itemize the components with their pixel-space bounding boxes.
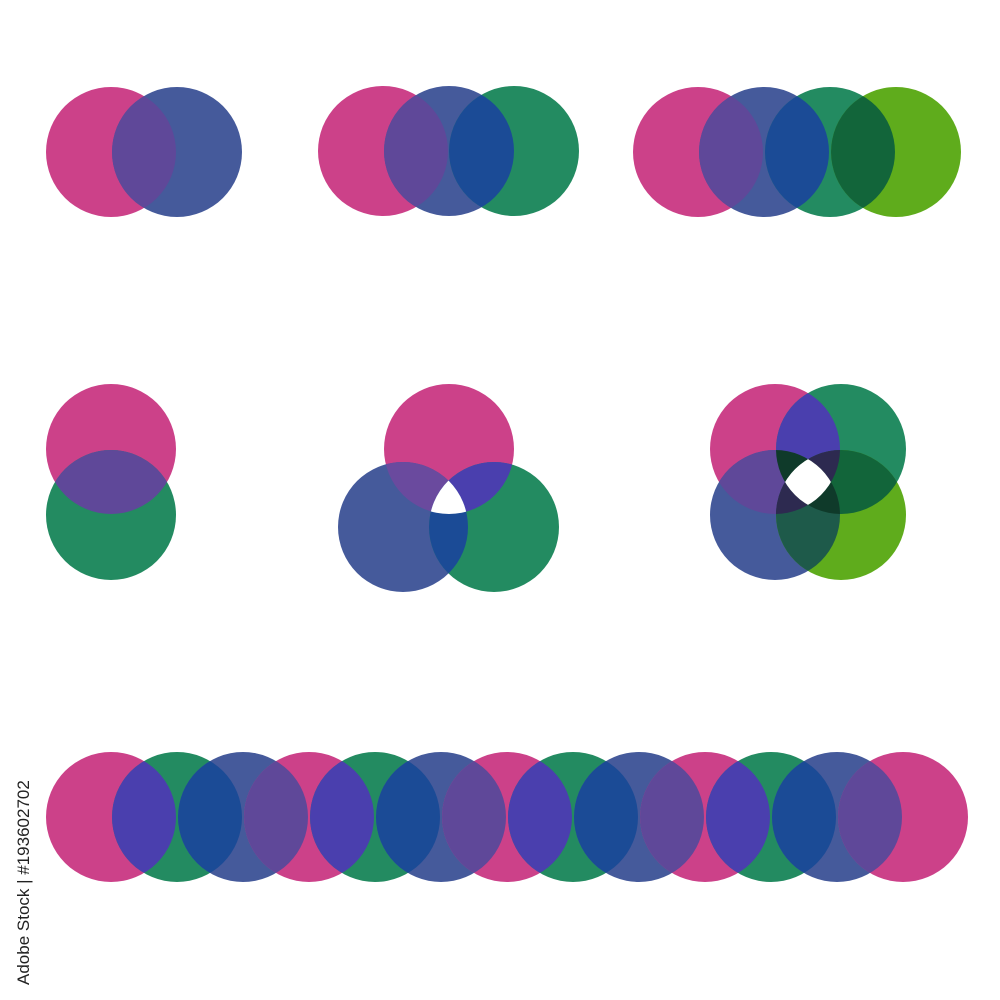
diagram: four-circle venn [710,384,906,580]
diagram: four circles row [633,87,961,217]
diagram: three-circle venn [338,384,559,592]
stock id label: Adobe Stock | #193602702 [14,780,33,985]
diagram: two circles [46,87,242,217]
diagram: chain of circles [46,752,968,882]
diagram: three circles row [318,86,579,216]
diagram: two stacked circles [46,384,176,580]
